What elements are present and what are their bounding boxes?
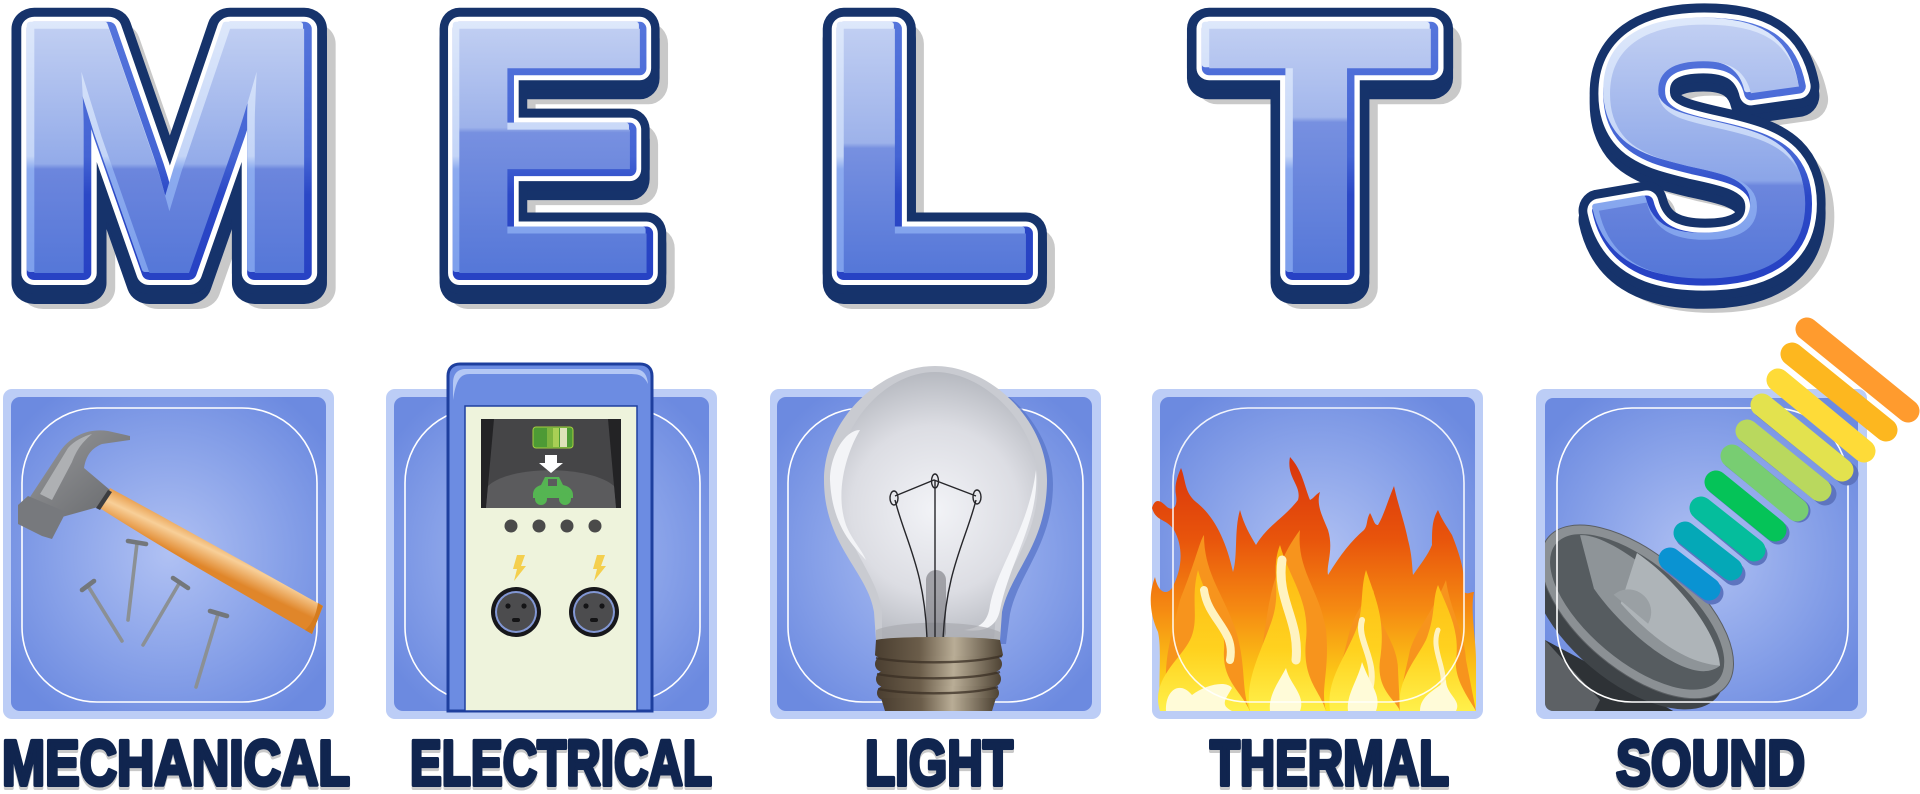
panel: light (770, 366, 1101, 719)
outline frame (1173, 408, 1464, 702)
icon: bulb (824, 366, 1053, 711)
icon: sound waves (1670, 329, 1908, 593)
icon: charging station (448, 364, 652, 711)
icon: hammer (18, 430, 323, 634)
panel: sound (1502, 329, 1908, 742)
filament (890, 474, 981, 640)
icon: flames (1151, 457, 1476, 711)
screw base (875, 637, 1003, 711)
icon: speaker (1545, 524, 1734, 711)
sockets (491, 587, 619, 637)
icon: nails (82, 541, 227, 687)
screen (481, 419, 621, 508)
bolts (513, 555, 606, 581)
panel: mechanical (3, 389, 334, 719)
indicator lights (504, 520, 602, 532)
panel: thermal (1151, 389, 1483, 719)
panel: electrical (386, 364, 717, 719)
